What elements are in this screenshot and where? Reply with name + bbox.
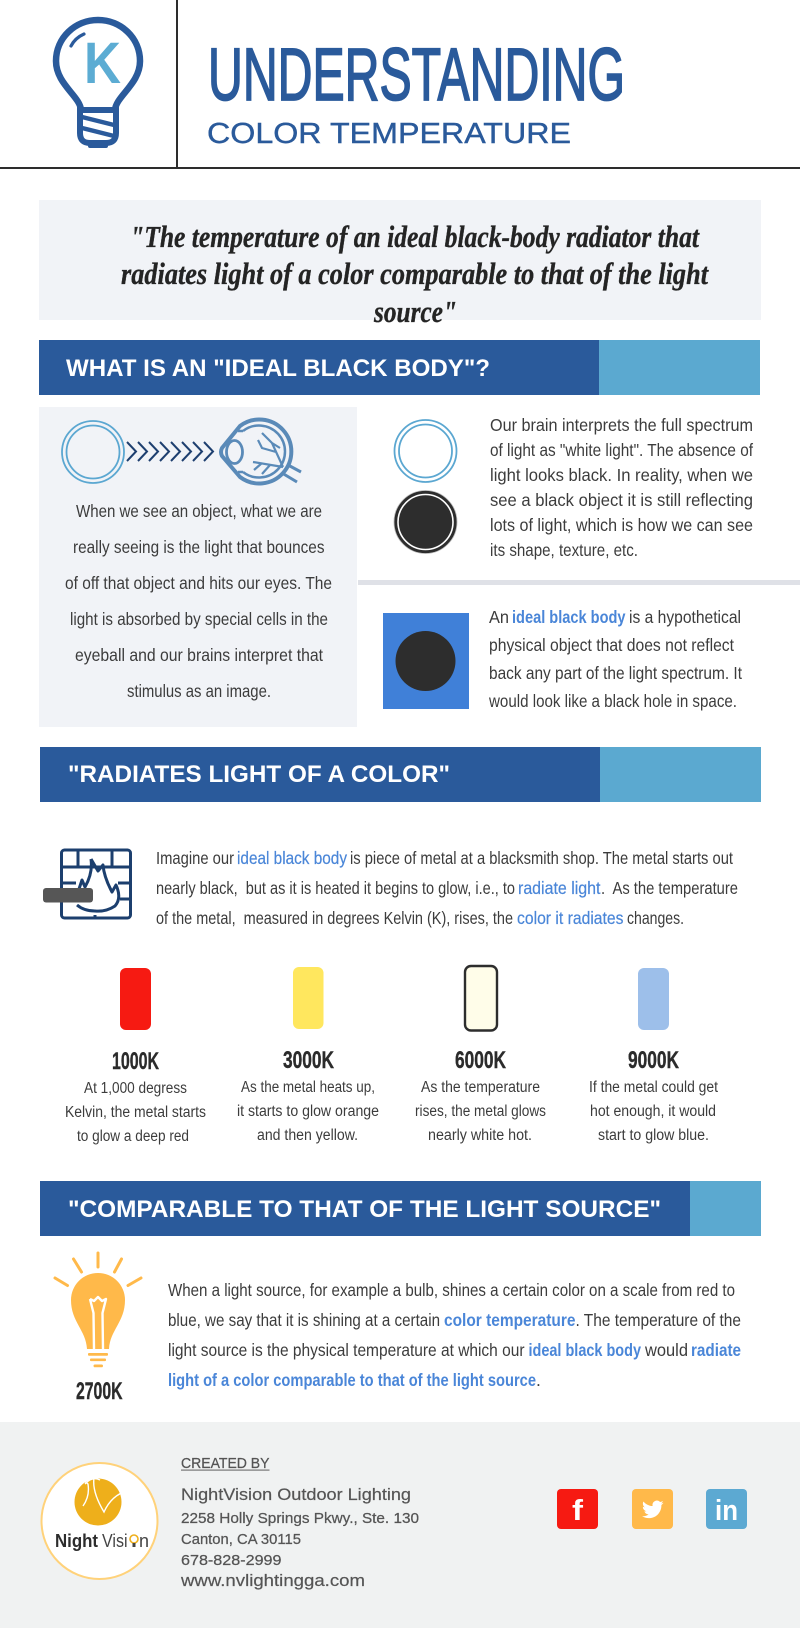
panel: definition quote: "The temperature of an ideal black-body radiator that: [130, 219, 700, 254]
panel: definition quote: [39, 200, 761, 329]
text: contact details: 678-828-2999: [181, 1552, 282, 1569]
text: how we see: stimulus as an image.: [127, 681, 271, 701]
text: white light and black objects: light looks black. In reality, when we: [490, 465, 753, 485]
text: color temperature explanation: [168, 1280, 741, 1390]
text: contact details: Canton, CA 30115: [181, 1531, 301, 1548]
column: 1000K: [65, 968, 206, 1145]
text: ideal black body definition: back any part of the light spectrum. It: [489, 663, 742, 683]
icon: facebook: [557, 1489, 598, 1529]
heading: radiates light of a color: [40, 747, 761, 802]
text: white light and black objects: see a black object it is still reflecting: [490, 490, 753, 510]
column: 6000K: nearly white hot.: [428, 1127, 532, 1144]
text: color temperature explanation: ideal black body: [528, 1340, 641, 1360]
icon: ring object: [62, 421, 124, 483]
text: blacksmith explanation: nearly black, but as it is heated it begins to glow, i.e., to: [156, 878, 515, 898]
column: 9000K: [589, 968, 719, 1144]
logo: NightVision: Night: [55, 1531, 98, 1551]
icon: glowing bulb 2700K: [55, 1253, 141, 1367]
subtitle: COLOR TEMPERATURE: [207, 118, 571, 150]
icon: black disc on blue square: [383, 613, 469, 709]
panel: footer: [0, 1422, 800, 1628]
column: 1000K: Kelvin, the metal starts: [65, 1104, 206, 1121]
icon: eye cross-section: [221, 419, 301, 483]
icon: light bulb with K: K: [84, 31, 121, 96]
icon: chevron arrows: [127, 442, 213, 461]
column: 3000K: [237, 967, 379, 1144]
text: ideal black body definition: is a hypothetical: [629, 607, 741, 627]
text: how we see: really seeing is the light that bounces: [73, 537, 325, 557]
column: 3000K: and then yellow.: [257, 1127, 358, 1144]
text: blacksmith explanation: Imagine our: [156, 848, 234, 868]
text: how we see: of off that object and hits our eyes. The: [65, 573, 332, 593]
logo: NightVision: [42, 1463, 158, 1579]
text: how we see: light is absorbed by special cells in the: [70, 609, 328, 629]
text: color temperature explanation: . The temperature of the: [576, 1310, 741, 1330]
text: color temperature explanation: would: [644, 1340, 688, 1360]
icon: twitter: [632, 1489, 673, 1529]
text: ideal black body definition: [488, 607, 742, 711]
text: color temperature explanation: .: [536, 1370, 541, 1390]
text: how we see: eyeball and our brains interpret that: [75, 645, 323, 665]
column: 1000K: to glow a deep red: [77, 1128, 189, 1145]
panel: definition quote: source": [373, 294, 457, 329]
column: 3000K: it starts to glow orange: [237, 1103, 379, 1120]
text: how we see: When we see an object, what we are: [76, 501, 322, 521]
text: blacksmith explanation: radiate light: [518, 878, 601, 898]
text: color temperature explanation: color temperature: [444, 1310, 576, 1330]
column: 6000K: As the temperature: [421, 1079, 540, 1096]
column: 9000K: 9000K: [628, 1047, 679, 1074]
column: 3000K: 3000K: [283, 1047, 334, 1074]
column: 3000K: As the metal heats up,: [241, 1079, 375, 1096]
icon: facebook: f: [572, 1495, 583, 1527]
heading: radiates light of a color: "RADIATES LIGHT OF A COLOR": [68, 761, 450, 788]
icon: light bulb with K: [56, 20, 140, 148]
icon: white light ring: [394, 420, 456, 482]
column: 6000K: 6000K: [455, 1047, 506, 1074]
text: how we see: [65, 501, 332, 701]
text: blacksmith explanation: ideal black body: [237, 848, 347, 868]
text: white light and black objects: its shape, texture, etc.: [490, 540, 638, 560]
icon: linkedin: in: [715, 1495, 738, 1527]
column: 9000K: start to glow blue.: [598, 1127, 709, 1144]
label: 2700K: 2700K: [76, 1378, 123, 1405]
text: blacksmith explanation: [156, 848, 738, 928]
text: blacksmith explanation: is piece of metal at a blacksmith shop. The metal starts out: [350, 848, 733, 868]
column: 1000K: 1000K: [112, 1048, 159, 1075]
logo: NightVision: Visi: [102, 1531, 128, 1551]
heading: what is an ideal black body: WHAT IS AN "IDEAL BLACK BODY"?: [66, 355, 490, 382]
text: blacksmith explanation: of the metal, measured in degrees Kelvin (K), rises, the: [156, 908, 513, 928]
text: blacksmith explanation: changes.: [627, 908, 684, 928]
text: blacksmith explanation: . As the temperature: [601, 878, 738, 898]
logo: NightVision: n: [139, 1531, 149, 1551]
text: color temperature explanation: radiate: [691, 1340, 741, 1360]
column: 6000K: [415, 966, 546, 1144]
text: ideal black body definition: ideal black body: [512, 607, 626, 627]
text: ideal black body definition: An: [489, 607, 509, 627]
heading: comparable to that of the light source: [40, 1181, 761, 1236]
text: white light and black objects: [490, 415, 753, 560]
panel: how we see: [39, 407, 357, 727]
text: created by: CREATED BY: [181, 1455, 270, 1472]
text: contact details: [180, 1485, 419, 1590]
icon: forge with heated metal: [43, 850, 130, 918]
text: white light and black objects: Our brain interprets the full spectrum: [490, 415, 753, 435]
icon: black circle: [394, 490, 457, 554]
text: white light and black objects: lots of light, which is how we can see: [490, 515, 753, 535]
column: 6000K: rises, the metal glows: [415, 1103, 546, 1120]
heading: comparable to that of the light source: "COMPARABLE TO THAT OF THE LIGHT SOURCE": [68, 1196, 661, 1223]
column: 9000K: If the metal could get: [589, 1079, 719, 1096]
icon: linkedin: [706, 1489, 747, 1529]
text: contact details: www.nvlightingga.com: [180, 1571, 365, 1590]
column: 9000K: hot enough, it would: [590, 1103, 716, 1120]
text: color temperature explanation: light source is the physical temperature at which our: [168, 1340, 525, 1360]
panel: definition quote: radiates light of a color comparable to that of the light: [121, 256, 709, 291]
text: contact details: NightVision Outdoor Lighting: [181, 1485, 411, 1504]
text: color temperature explanation: blue, we say that it is shining at a certain: [168, 1310, 440, 1330]
column: 1000K: At 1,000 degress: [84, 1080, 187, 1097]
text: contact details: 2258 Holly Springs Pkwy., Ste. 130: [181, 1510, 419, 1527]
text: ideal black body definition: physical object that does not reflect: [489, 635, 734, 655]
heading: what is an ideal black body: [39, 340, 760, 395]
text: white light and black objects: of light as "white light". The absence of: [490, 440, 753, 460]
text: ideal black body definition: would look like a black hole in space.: [488, 691, 737, 711]
text: color temperature explanation: light of a color comparable to that of the light source: [168, 1370, 536, 1390]
text: blacksmith explanation: color it radiates: [517, 908, 624, 928]
